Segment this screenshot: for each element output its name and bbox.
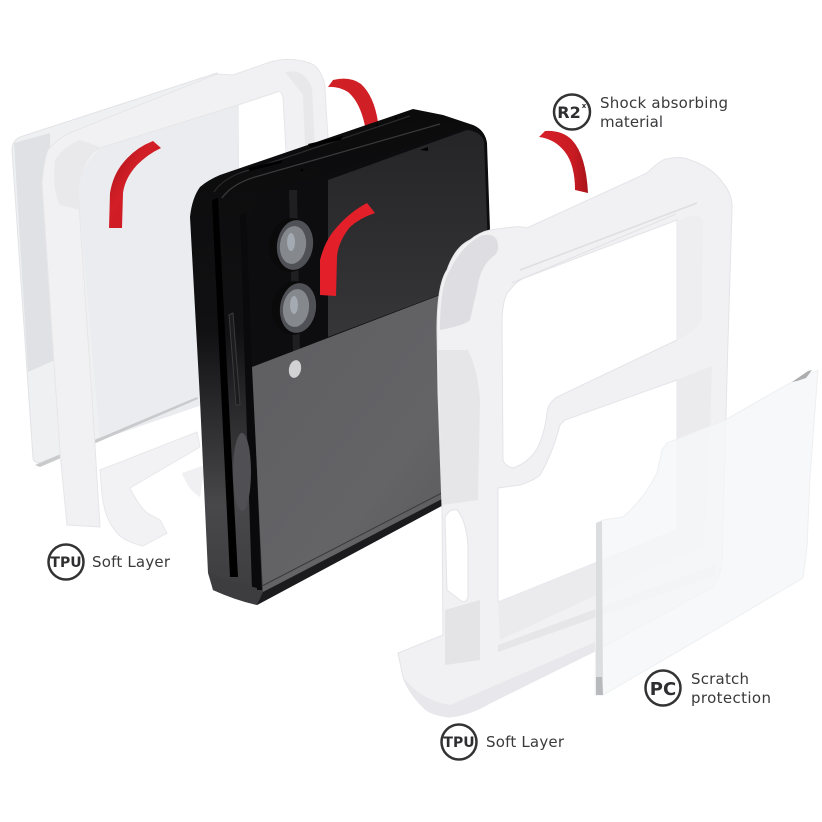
text: Shock absorbing material: Shock absorbing [600, 94, 728, 112]
red strip: behind phone [328, 79, 378, 126]
red strip: left case [109, 141, 161, 228]
back plate: left case [12, 73, 240, 467]
badge: R2x: R2 [557, 103, 581, 122]
top face [214, 116, 440, 198]
rear panel: gray [252, 276, 490, 592]
badge: R2x: x [582, 102, 587, 110]
rear glass: black [247, 128, 490, 367]
text: Soft Layer bottom: Soft Layer [486, 733, 565, 751]
phone [190, 109, 490, 605]
badge: PC: PC [650, 679, 676, 700]
red strip: right case [539, 131, 588, 193]
PC plate: scratch protection [595, 370, 818, 695]
text: Scratch protection: protection [691, 689, 771, 707]
label: PC scratch protection [646, 670, 771, 707]
left TPU frame [42, 59, 330, 546]
badge: R2x [554, 94, 590, 130]
flash [287, 359, 303, 379]
label: TPU soft layer left [48, 544, 171, 580]
badge: TPU left: TPU [50, 555, 82, 571]
text: Scratch protection [691, 670, 771, 707]
badge: TPU bottom: TPU [443, 735, 475, 751]
text: Shock absorbing material [600, 94, 728, 131]
side hinge bands [209, 198, 262, 605]
label: R2x shock absorbing material [554, 94, 728, 131]
camera lenses [265, 215, 320, 338]
frame shading [403, 203, 716, 717]
label: TPU soft layer bottom [442, 724, 565, 760]
red strip: on phone [320, 203, 375, 296]
text: Scratch protection: Scratch [691, 670, 749, 688]
right TPU frame [398, 158, 732, 717]
text: Shock absorbing material: material [600, 113, 663, 131]
text: Soft Layer left: Soft Layer [92, 553, 171, 571]
